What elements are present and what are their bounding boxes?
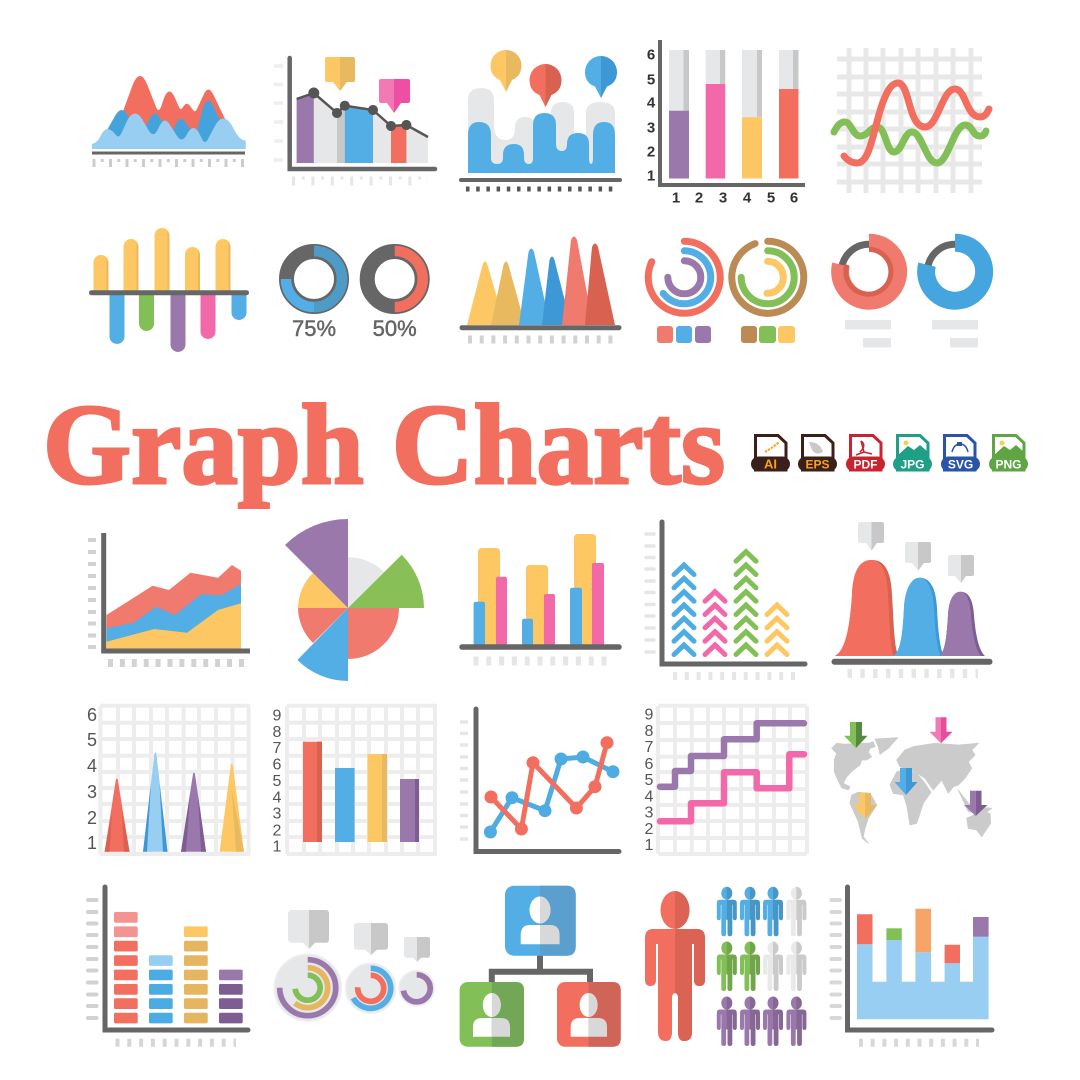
chart: world map with arrows xyxy=(832,717,992,843)
chart: bell curves with callouts xyxy=(834,522,990,674)
donut 50% xyxy=(367,251,423,307)
arrow purple xyxy=(964,791,988,816)
chart: people pictogram xyxy=(645,887,806,1046)
axis labels: 3 xyxy=(87,782,97,802)
large person xyxy=(645,891,705,1041)
x axis labels: 5 xyxy=(767,190,775,206)
donut large xyxy=(274,954,341,1021)
x axis labels: 6 xyxy=(790,190,798,206)
arrow yellow xyxy=(853,793,877,819)
axis labels xyxy=(645,706,654,854)
axis labels: 6 xyxy=(87,705,97,725)
node top xyxy=(505,886,576,956)
labels: 50% xyxy=(373,316,417,341)
axis labels: 6 xyxy=(273,756,282,774)
y axis labels: 2 xyxy=(647,144,655,160)
title: Graph Charts xyxy=(43,381,725,508)
chart: org hierarchy xyxy=(460,886,621,1047)
axis labels: 3 xyxy=(273,806,282,822)
row green xyxy=(717,942,806,991)
chart: radial donuts with callouts xyxy=(274,910,434,1021)
y axis labels: 1 xyxy=(647,168,655,184)
axis labels: 2 xyxy=(645,821,654,838)
x axis labels: 2 xyxy=(695,190,703,206)
callouts xyxy=(288,910,430,962)
chart: layered mountain area xyxy=(92,76,246,163)
arrow pink xyxy=(930,717,952,743)
axis labels: 9 xyxy=(645,706,654,724)
chart: overlapping triangles xyxy=(462,236,619,340)
rings left xyxy=(648,241,720,313)
column red xyxy=(114,912,138,1023)
donut medium xyxy=(346,963,396,1013)
axis labels: 1 xyxy=(645,837,654,854)
axis labels: 6 xyxy=(645,756,654,773)
placeholder label bars xyxy=(845,320,978,348)
axis labels: 1 xyxy=(273,838,282,856)
series blue xyxy=(484,750,620,838)
donut small xyxy=(399,971,434,1006)
callout: pink xyxy=(379,79,410,113)
chart: two marker lines xyxy=(460,709,620,852)
node left xyxy=(460,982,524,1047)
x axis labels: 1 xyxy=(672,190,680,206)
chart: up and down rounded bars xyxy=(92,228,246,352)
chart: grouped bars xyxy=(462,534,619,661)
axis labels: 4 xyxy=(645,788,654,806)
pin: red xyxy=(530,64,562,107)
icon: JPG: JPG xyxy=(900,458,925,472)
icon: PDF xyxy=(846,436,885,472)
x axis labels: 4 xyxy=(743,190,752,206)
chart: progress donuts 75% and 50% xyxy=(286,251,423,341)
chart: line over bars with callouts xyxy=(274,57,435,181)
rings right xyxy=(732,241,804,313)
pin: blue xyxy=(585,56,617,98)
arrow green xyxy=(844,722,868,748)
icon: SVG: SVG xyxy=(948,458,973,472)
donut blue xyxy=(926,243,984,301)
icon: PDF: PDF xyxy=(854,458,878,472)
chart: thick arc donuts xyxy=(840,243,984,348)
axis labels: 4 xyxy=(273,790,282,806)
chart: blue rounded columns with pins xyxy=(461,50,620,189)
labels xyxy=(292,316,417,341)
icon: AI: AI xyxy=(764,457,777,472)
row purple xyxy=(717,996,806,1046)
axis labels: 7 xyxy=(645,739,654,756)
x axis labels xyxy=(672,190,798,206)
y axis labels xyxy=(647,46,656,184)
y axis labels: 6 xyxy=(647,46,655,64)
axis labels xyxy=(87,705,97,853)
x axis labels: 3 xyxy=(719,190,727,206)
donut red xyxy=(840,243,898,301)
series red xyxy=(484,736,614,836)
axis labels: 1 xyxy=(87,833,97,853)
chart: numbered fill bars xyxy=(647,40,805,206)
file format icons xyxy=(751,436,1028,472)
pin: yellow xyxy=(490,50,522,92)
y axis labels: 3 xyxy=(647,120,655,136)
callouts xyxy=(858,522,974,583)
icon: SVG xyxy=(941,436,980,472)
chart: segmented equalizer bars xyxy=(88,887,248,1043)
axis labels xyxy=(273,708,282,856)
icon: EPS: EPS xyxy=(805,458,830,472)
axis labels: 8 xyxy=(645,723,654,740)
callout: yellow xyxy=(325,57,355,91)
icon: PNG xyxy=(989,436,1028,472)
arrow blue xyxy=(894,768,918,795)
axis labels: 7 xyxy=(273,740,282,757)
axis labels: 8 xyxy=(273,724,282,741)
axis labels: 2 xyxy=(87,808,97,828)
chart: bars on grid xyxy=(273,706,437,856)
icon: PNG: PNG xyxy=(995,458,1022,472)
chart: concentric arc rings xyxy=(648,241,804,343)
chart: chevron stacks xyxy=(646,522,805,676)
axis labels: 3 xyxy=(645,804,654,822)
chart: wave lines on grid xyxy=(834,48,989,193)
axis labels: 5 xyxy=(273,773,282,790)
axis labels: 2 xyxy=(273,822,282,840)
y axis labels: 4 xyxy=(647,94,656,112)
axis labels: 5 xyxy=(87,730,97,750)
legend swatches xyxy=(657,326,795,343)
node right xyxy=(557,982,621,1047)
icon: JPG xyxy=(893,436,932,472)
icon: AI xyxy=(751,436,790,472)
labels: 75% xyxy=(292,316,336,341)
axis labels: 5 xyxy=(645,772,654,789)
chart: rose pie xyxy=(285,519,424,681)
chart: skyline stacked bars xyxy=(832,887,992,1043)
axis labels: 4 xyxy=(87,756,97,776)
chart: stacked area xyxy=(88,533,250,663)
chart: step lines on grid xyxy=(645,706,807,854)
donut 75% xyxy=(286,251,342,307)
column blue xyxy=(149,955,173,1023)
y axis labels: 5 xyxy=(647,72,655,88)
axis labels: 9 xyxy=(273,708,282,724)
row blue xyxy=(717,887,806,936)
icon: EPS xyxy=(798,436,837,472)
column yellow xyxy=(184,926,208,1023)
map continents xyxy=(832,738,992,843)
column purple xyxy=(219,970,243,1023)
chart: cones on grid xyxy=(87,705,250,854)
